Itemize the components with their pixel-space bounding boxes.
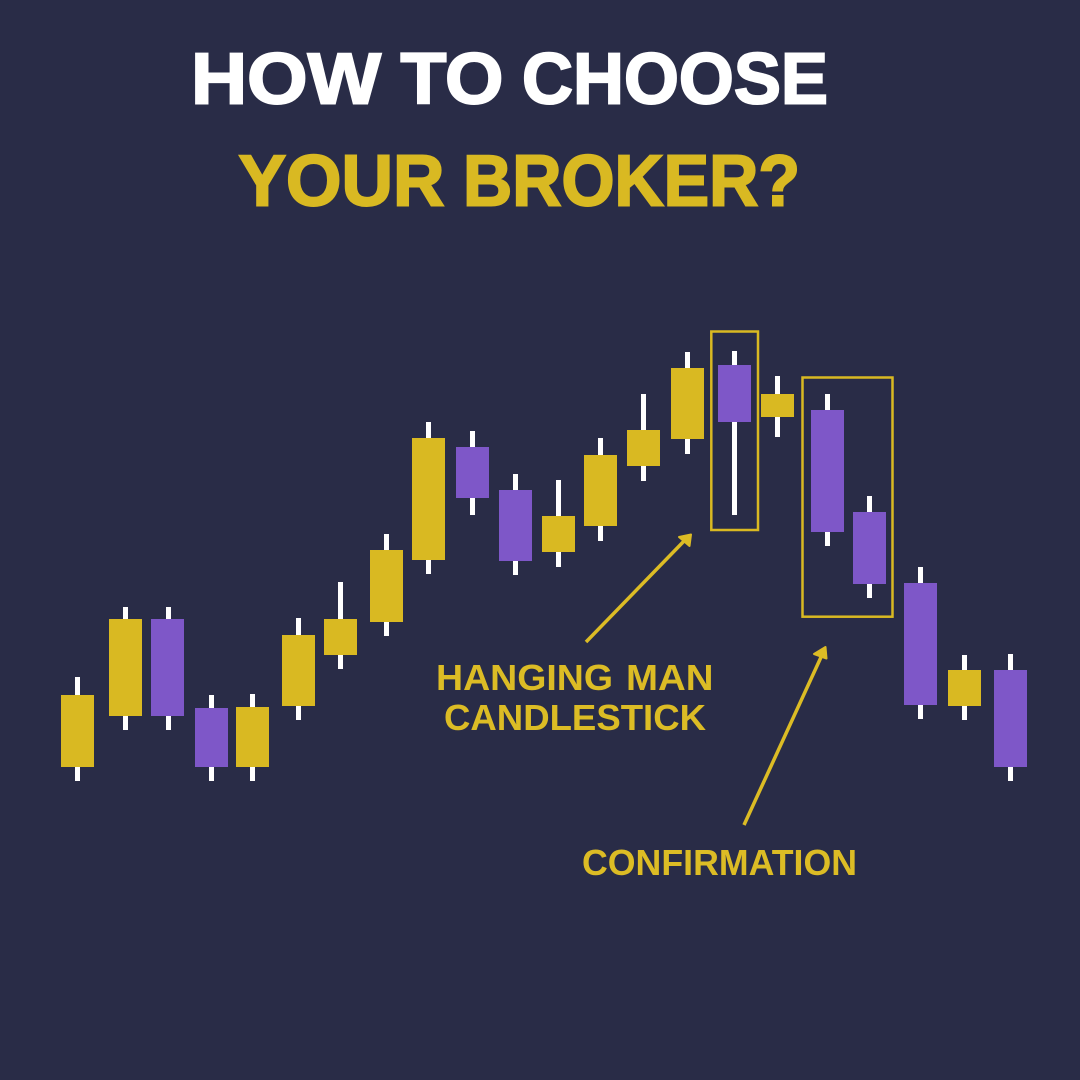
label: hanging man candlestick: HANGING: [436, 657, 613, 698]
label: hanging man candlestick: [436, 657, 714, 738]
arrow: to hanging man: [586, 534, 691, 642]
title: YOUR: [238, 142, 444, 222]
arrow: to confirmation: [744, 647, 826, 825]
label: confirmation: CONFIRMATION: [582, 842, 857, 883]
title: TO: [400, 40, 504, 120]
title: BROKER?: [463, 142, 800, 222]
candlestick chart: [61, 351, 1027, 781]
hanging man highlight box: [711, 332, 758, 530]
label: hanging man candlestick: MAN: [626, 657, 714, 698]
label: hanging man candlestick: CANDLESTICK: [444, 697, 706, 738]
confirmation highlight box: [802, 378, 892, 617]
title: CHOOSE: [522, 40, 828, 120]
title: HOW: [191, 40, 381, 120]
title: [191, 40, 828, 222]
